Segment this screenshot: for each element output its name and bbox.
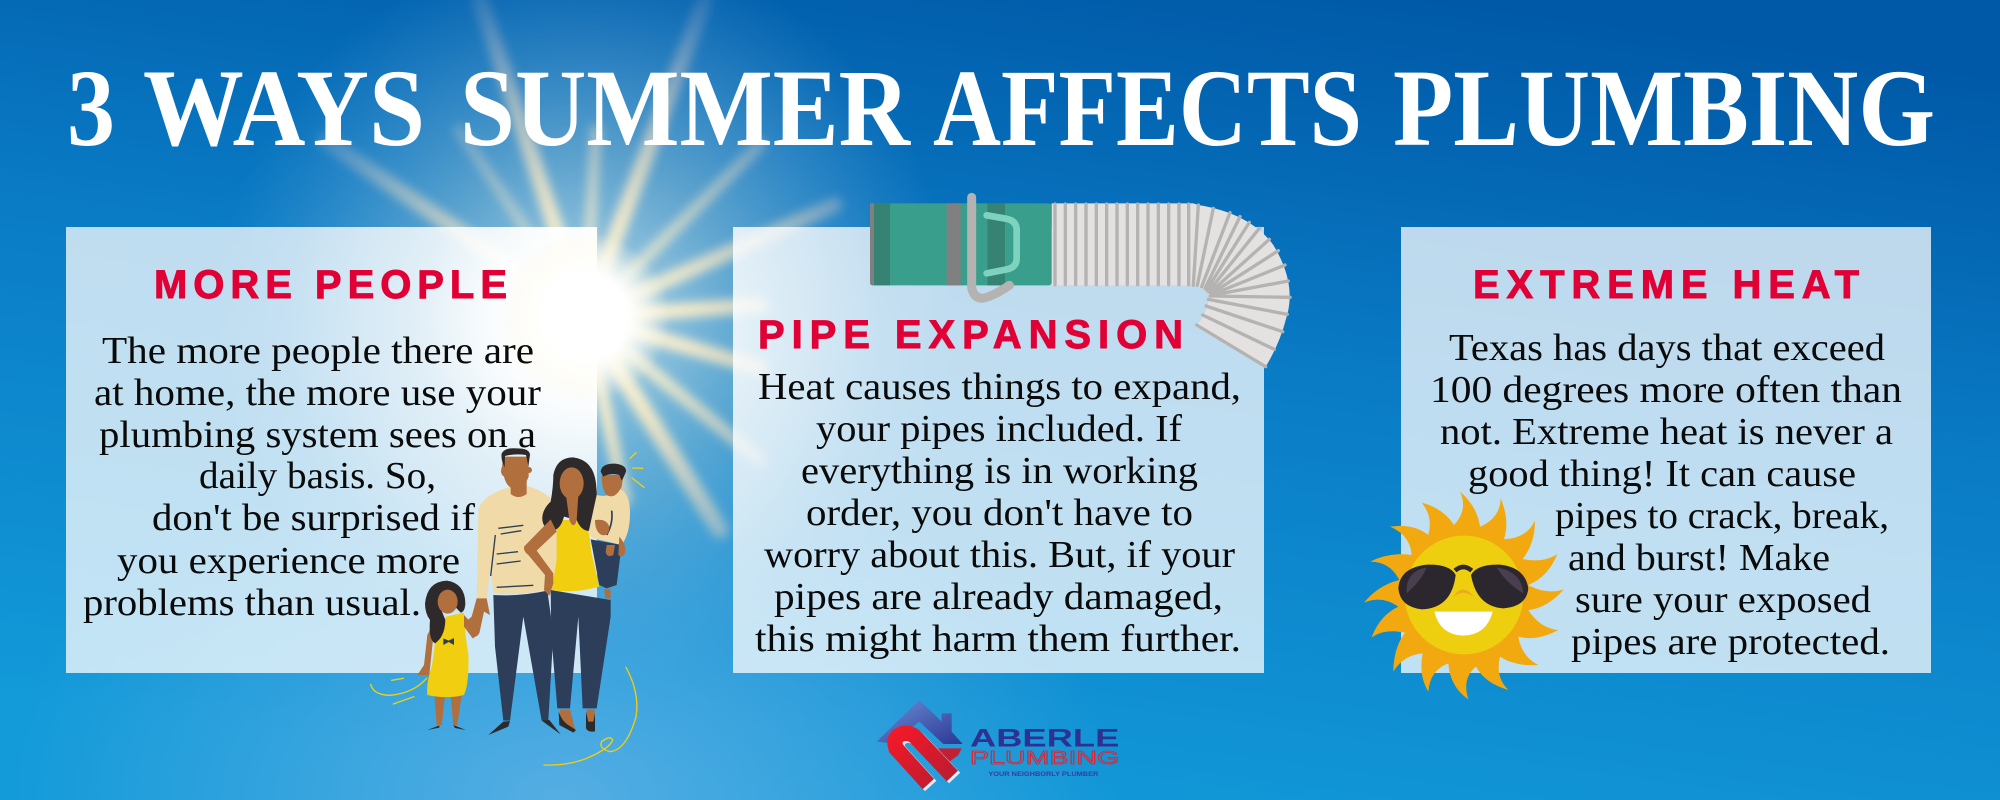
text block: pipe expansion: everything is in working xyxy=(801,450,1198,492)
text block: extreme heat: sure your exposed xyxy=(1575,579,1871,621)
text block: more people: don't be surprised if xyxy=(152,497,475,539)
text block: more people xyxy=(83,330,541,624)
boy being carried xyxy=(588,464,630,598)
title: WAYS xyxy=(143,47,425,169)
text block: more people: The more people there are xyxy=(102,330,534,372)
logo red pipe xyxy=(895,733,955,786)
heading: extreme heat: EXTREME HEAT xyxy=(1473,263,1859,307)
logo: Aberle Plumbing xyxy=(877,700,1119,786)
logo wedge under roof xyxy=(938,748,962,763)
text block: more people: plumbing system sees on a xyxy=(99,414,536,456)
text block: extreme heat xyxy=(1430,327,1902,663)
text block: extreme heat: 100 degrees more often than xyxy=(1430,369,1902,411)
heading: more people: MORE PEOPLE xyxy=(154,263,507,307)
text block: more people: at home, the more use your xyxy=(94,372,541,414)
text block: extreme heat: and burst! Make xyxy=(1568,537,1830,579)
text block: pipe expansion: this might harm them further. xyxy=(755,618,1241,660)
text block: more people: problems than usual. xyxy=(83,582,421,624)
logo subword: PLUMBING xyxy=(970,747,1119,768)
text block: pipe expansion: pipes are already damaged, xyxy=(774,576,1223,618)
title xyxy=(67,47,1935,169)
girl xyxy=(417,581,482,730)
text block: extreme heat: good thing! It can cause xyxy=(1468,453,1856,495)
title: PLUMBING xyxy=(1393,47,1935,169)
illustration: family xyxy=(371,448,644,765)
title: 3 xyxy=(67,47,115,169)
logo house roof xyxy=(877,700,963,744)
motion swirls xyxy=(371,453,644,765)
text block: pipe expansion: Heat causes things to expand, xyxy=(758,366,1241,408)
text block: pipe expansion: your pipes included. If xyxy=(816,408,1182,450)
logo wordmark: ABERLE xyxy=(970,726,1119,753)
text block: pipe expansion: worry about this. But, if your xyxy=(764,534,1235,576)
sun flare rays xyxy=(325,0,835,530)
text block: extreme heat: not. Extreme heat is never a xyxy=(1440,411,1893,453)
logo tagline: YOUR NEIGHBORLY PLUMBER xyxy=(988,772,1099,778)
icon: sun with sunglasses xyxy=(1364,492,1564,699)
text block: more people: daily basis. So, xyxy=(199,455,436,497)
icon: flexible pipe xyxy=(870,197,1290,367)
title: SUMMER xyxy=(460,47,911,169)
text block: pipe expansion xyxy=(755,366,1241,660)
text block: extreme heat: pipes are protected. xyxy=(1571,621,1890,663)
text block: pipe expansion: order, you don't have to xyxy=(806,492,1193,534)
text block: more people: you experience more xyxy=(117,540,460,582)
panel: more people background xyxy=(66,227,597,673)
heading: pipe expansion: PIPE EXPANSION xyxy=(758,313,1183,357)
sun flare core xyxy=(500,232,670,402)
woman xyxy=(524,457,611,733)
panel: extreme heat background xyxy=(1401,227,1931,673)
text block: extreme heat: pipes to crack, break, xyxy=(1555,495,1889,537)
man xyxy=(464,448,561,735)
panel: pipe expansion background xyxy=(733,227,1264,673)
title: AFFECTS xyxy=(933,47,1362,169)
text block: extreme heat: Texas has days that exceed xyxy=(1449,327,1885,369)
